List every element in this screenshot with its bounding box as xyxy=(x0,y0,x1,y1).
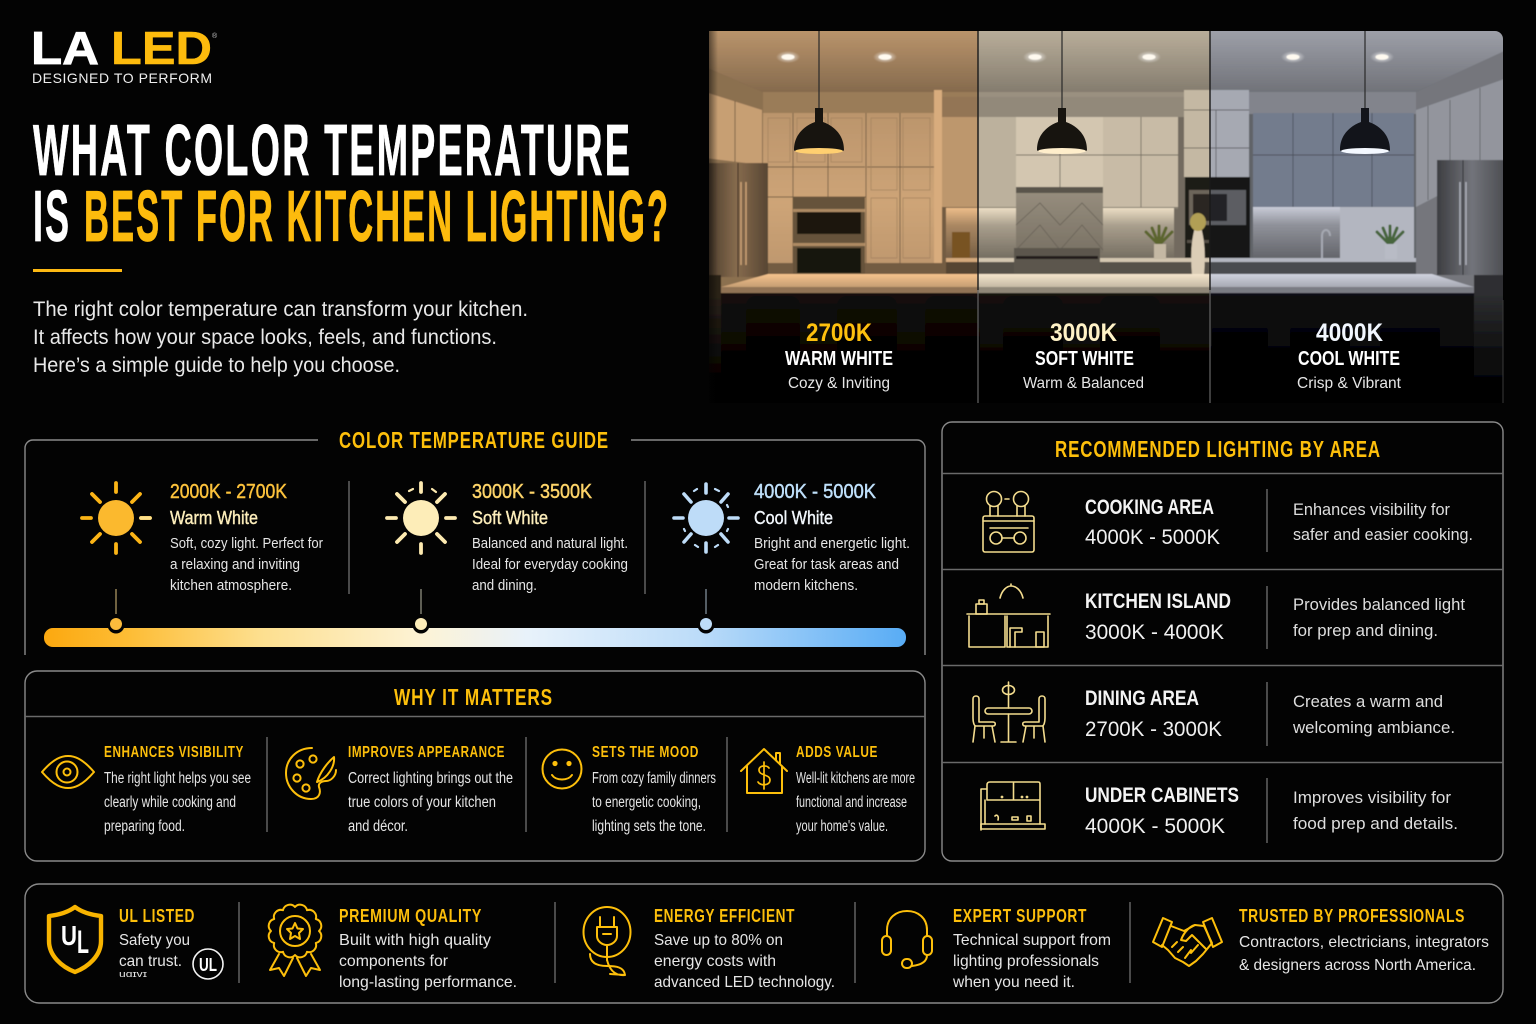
cool white description: Great for task areas and xyxy=(754,556,899,573)
row: under cabinets: 4000K - 5000K xyxy=(1085,815,1225,838)
intro paragraph: Here’s a simple guide to help you choose. xyxy=(33,354,400,377)
item: sets the mood: From cozy family dinners xyxy=(592,770,716,787)
photo caption: 3000K: Warm & Balanced xyxy=(1023,375,1144,392)
item: UL listed: can trust. xyxy=(119,953,182,970)
icon: smiley xyxy=(542,750,582,788)
item: enhances visibility: ENHANCES VISIBILITY xyxy=(104,744,244,761)
item: premium quality: Built with high quality xyxy=(339,932,491,949)
icon: quality rosette xyxy=(269,905,321,976)
badge: UL xyxy=(193,949,223,979)
soft white description: and dining. xyxy=(472,577,537,594)
logo: LED xyxy=(111,22,212,74)
warm white description: kitchen atmosphere. xyxy=(170,577,292,594)
kitchen photo comparison xyxy=(700,27,1507,407)
row: under cabinets: food prep and details. xyxy=(1293,814,1458,833)
item: sets the mood: lighting sets the tone. xyxy=(592,818,706,835)
logo: ® xyxy=(212,32,218,40)
row: cooking area: 4000K - 5000K xyxy=(1085,526,1220,549)
item: energy efficient: ENERGY EFFICIENT xyxy=(654,906,795,926)
item: sets the mood xyxy=(592,744,716,835)
soft white description: 3000K - 3500K xyxy=(472,481,593,503)
intro paragraph: It affects how your space looks, feels, and functions. xyxy=(33,326,497,349)
soft white description: Soft White xyxy=(472,507,548,528)
item: adds value xyxy=(796,744,915,835)
photo caption: 2700K xyxy=(785,319,893,392)
logo: DESIGNED TO PERFORM xyxy=(32,70,212,86)
item: adds value: ADDS VALUE xyxy=(796,744,878,761)
item: expert support: lighting professionals xyxy=(953,953,1099,970)
item: improves appearance: IMPROVES APPEARANCE xyxy=(348,744,505,761)
heading: color temperature guide: COLOR TEMPERATURE GUIDE xyxy=(339,427,609,453)
photo caption: 4000K: Crisp & Vibrant xyxy=(1297,375,1402,392)
icon: UL shield: L xyxy=(77,924,89,960)
icon: eye xyxy=(42,756,94,788)
row: under cabinets: UNDER CABINETS xyxy=(1085,784,1239,807)
cool white description: Cool White xyxy=(754,507,833,528)
item: enhances visibility: The right light helps you see xyxy=(104,770,251,787)
photo caption: 2700K: 2700K xyxy=(806,319,872,347)
item: UL listed: Safety you xyxy=(119,932,190,949)
title accent rule xyxy=(33,269,122,272)
icon: UL shield: U xyxy=(61,920,77,951)
warm white description xyxy=(170,481,323,594)
cool white description: 4000K - 5000K xyxy=(754,481,877,503)
item: sets the mood: to energetic cooking, xyxy=(592,794,701,811)
logo: LA xyxy=(31,22,99,74)
temperature gradient scale xyxy=(44,589,906,647)
item: energy efficient: energy costs with xyxy=(654,953,776,970)
soft white description: Balanced and natural light. xyxy=(472,535,628,552)
icon: under cabinets xyxy=(981,782,1045,830)
warm white description: a relaxing and inviting xyxy=(170,556,300,573)
icon: handshake xyxy=(1153,918,1222,966)
item: adds value: your home's value. xyxy=(796,818,888,835)
item: adds value: functional and increase xyxy=(796,794,907,811)
row: under cabinets xyxy=(1085,784,1458,838)
warm white description: Soft, cozy light. Perfect for xyxy=(170,535,323,552)
cool white description xyxy=(754,481,910,594)
row: dining area: Creates a warm and xyxy=(1293,692,1443,711)
warm white description: Warm White xyxy=(170,507,258,528)
item: improves appearance: and décor. xyxy=(348,818,408,835)
soft white description: Ideal for everyday cooking xyxy=(472,556,628,573)
item: premium quality: long-lasting performance. xyxy=(339,974,517,991)
item: UL listed: UL LISTED xyxy=(119,906,195,926)
photo caption: 4000K: 4000K xyxy=(1316,319,1383,347)
photo caption: 4000K: COOL WHITE xyxy=(1298,348,1400,370)
panel: recommended lighting by area xyxy=(942,422,1503,861)
photo caption: 4000K xyxy=(1297,319,1402,392)
row: kitchen island: KITCHEN ISLAND xyxy=(1085,590,1231,613)
icon: cooking area xyxy=(983,492,1034,552)
icon: headset xyxy=(882,911,932,968)
icon: soft sun xyxy=(387,483,455,553)
photo caption: 3000K: SOFT WHITE xyxy=(1035,348,1134,370)
item: expert support: EXPERT SUPPORT xyxy=(953,906,1087,926)
item: trusted by professionals xyxy=(1239,906,1489,974)
row: cooking area: safer and easier cooking. xyxy=(1293,525,1473,544)
item: premium quality: components for xyxy=(339,953,449,970)
item: trusted by professionals: & designers across North America. xyxy=(1239,957,1476,974)
icon: cool sun xyxy=(674,484,738,552)
icon: energy plug xyxy=(584,907,630,975)
row: dining area: welcoming ambiance. xyxy=(1292,718,1455,737)
item: expert support xyxy=(952,906,1111,991)
row: cooking area: COOKING AREA xyxy=(1085,496,1214,519)
row: kitchen island: 3000K - 4000K xyxy=(1085,621,1224,644)
panel: why it matters xyxy=(25,671,925,861)
icon: house value xyxy=(741,749,787,793)
icon: kitchen island xyxy=(967,584,1050,647)
item: improves appearance xyxy=(348,744,513,835)
row: cooking area xyxy=(1085,496,1473,549)
item: enhances visibility xyxy=(104,744,251,835)
item: improves appearance: true colors of your kitchen xyxy=(348,794,496,811)
title: WHAT COLOR TEMPERATURE xyxy=(33,111,632,191)
item: energy efficient: Save up to 80% on xyxy=(654,932,783,949)
row: kitchen island: Provides balanced light xyxy=(1293,595,1465,614)
intro paragraph: The right color temperature can transform your kitchen. xyxy=(33,298,528,321)
icon: palette xyxy=(286,748,336,799)
item: trusted by professionals: TRUSTED BY PROFESSIONALS xyxy=(1239,906,1465,926)
row: dining area: 2700K - 3000K xyxy=(1085,718,1222,741)
row: under cabinets: Improves visibility for xyxy=(1293,788,1451,807)
row: kitchen island xyxy=(1085,590,1465,644)
item: sets the mood: SETS THE MOOD xyxy=(592,744,699,761)
cool white description: modern kitchens. xyxy=(754,577,858,594)
item: energy efficient: advanced LED technology. xyxy=(654,974,835,991)
panel: color temperature guide xyxy=(25,427,925,655)
icon: warm sun xyxy=(82,483,150,553)
logo xyxy=(31,22,218,86)
item: premium quality xyxy=(339,906,517,991)
heading: recommended lighting: RECOMMENDED LIGHTING BY AREA xyxy=(1055,436,1381,462)
cool white description: Bright and energetic light. xyxy=(754,535,910,552)
item: UL listed xyxy=(119,906,195,979)
photo caption: 3000K: 3000K xyxy=(1050,319,1117,347)
intro paragraph xyxy=(33,298,528,377)
icon: dining area xyxy=(973,682,1045,742)
item: enhances visibility: clearly while cooking and xyxy=(104,794,236,811)
row: kitchen island: for prep and dining. xyxy=(1293,621,1438,640)
badge: UL: UL xyxy=(199,955,217,975)
icon: UL shield xyxy=(49,907,101,972)
title xyxy=(33,111,670,257)
panel: trust footer xyxy=(25,884,1503,1003)
item: enhances visibility: preparing food. xyxy=(104,818,185,835)
row: dining area: DINING AREA xyxy=(1085,687,1199,710)
text: BEST FOR KITCHEN LIGHTING? xyxy=(84,177,670,257)
item: expert support: Technical support from xyxy=(953,932,1111,949)
item: trusted by professionals: Contractors, electricians, integrators xyxy=(1239,934,1489,951)
item: energy efficient xyxy=(654,906,835,991)
warm white description: 2000K - 2700K xyxy=(170,481,288,503)
photo caption: 2700K: Cozy & Inviting xyxy=(788,375,890,392)
item: improves appearance: Correct lighting brings out the xyxy=(348,770,513,787)
heading: why it matters: WHY IT MATTERS xyxy=(394,684,553,710)
photo caption: 2700K: WARM WHITE xyxy=(785,348,893,370)
soft white description xyxy=(472,481,628,594)
item: adds value: Well-lit kitchens are more xyxy=(796,770,915,787)
title: IS xyxy=(33,177,71,257)
photo caption: 3000K xyxy=(1023,319,1144,392)
item: premium quality: PREMIUM QUALITY xyxy=(339,906,482,926)
row: dining area xyxy=(1085,687,1455,741)
item: expert support: when you need it. xyxy=(952,974,1075,991)
row: cooking area: Enhances visibility for xyxy=(1293,500,1450,519)
item: UL listed: uɑɪvɪ xyxy=(119,969,147,979)
